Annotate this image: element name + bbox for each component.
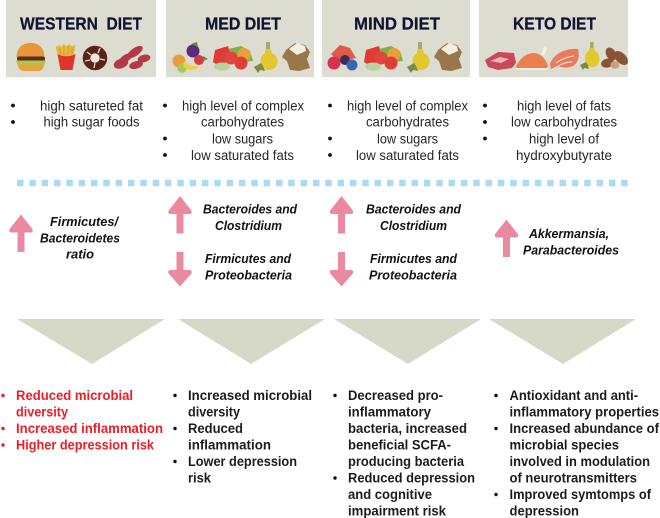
arrow: mind down bbox=[330, 252, 353, 286]
icon: salmon bbox=[550, 49, 579, 69]
text block: western microbiota: Firmicutes/ bbox=[50, 215, 120, 229]
text block: keto diet characteristics: low carbohydrates bbox=[511, 115, 617, 130]
text block: med microbiota: Clostridium bbox=[215, 219, 282, 233]
text block: keto outcomes: inflammatory properties bbox=[510, 405, 659, 420]
text block: western outcomes: Reduced microbial bbox=[16, 388, 133, 403]
icon: flour sack bbox=[282, 43, 310, 71]
text block: mind diet characteristics bbox=[328, 98, 468, 163]
text block: med diet characteristics bbox=[163, 98, 304, 163]
text block: mind outcomes: producing bacteria bbox=[348, 454, 464, 469]
icon: vegetables bbox=[213, 46, 253, 70]
icon: almonds bbox=[600, 46, 631, 69]
text block: western outcomes: Increased inflammation bbox=[16, 421, 163, 436]
text block: med outcomes: Increased microbial bbox=[188, 388, 312, 403]
text block: western outcomes: diversity bbox=[16, 405, 68, 420]
text block: mind microbiota: Firmicutes and bbox=[370, 252, 457, 266]
icon: steak bbox=[485, 52, 516, 70]
panel: mind diet header bbox=[322, 0, 470, 77]
panel: med diet header bbox=[166, 0, 314, 77]
text block: med diet characteristics: low saturated fats bbox=[191, 148, 294, 163]
text block: med outcomes: Reduced bbox=[188, 421, 243, 436]
arrow: med down bbox=[168, 252, 192, 286]
panel: keto diet header bbox=[479, 0, 631, 77]
text block: western diet characteristics: high sugar foods bbox=[44, 115, 140, 130]
text block: keto microbiota: Akkermansia, bbox=[528, 227, 609, 241]
heading: western diet: WESTERN DIET bbox=[20, 14, 142, 34]
arrow: med chevron bbox=[178, 319, 325, 364]
text block: western microbiota: Bacteroidetes bbox=[40, 232, 120, 246]
text block: keto microbiota bbox=[523, 227, 619, 258]
arrow: mind chevron bbox=[334, 319, 481, 364]
text block: western diet characteristics: high satureted fat bbox=[40, 98, 143, 113]
text block: mind outcomes: and cognitive bbox=[348, 487, 432, 502]
text block: mind diet characteristics: carbohydrates bbox=[366, 115, 449, 130]
icon: olive oil bbox=[580, 42, 600, 70]
icon: fries bbox=[56, 44, 76, 70]
text block: mind outcomes bbox=[333, 388, 475, 518]
text block: mind outcomes: bacteria, increased bbox=[348, 421, 467, 436]
text block: mind microbiota bbox=[366, 202, 461, 282]
arrow: keto up bbox=[495, 220, 518, 257]
text block: med outcomes: Lower depression bbox=[188, 454, 297, 469]
text block: med outcomes bbox=[173, 388, 312, 486]
text block: western outcomes: Higher depression risk bbox=[16, 438, 154, 452]
text block: med microbiota: Proteobacteria bbox=[205, 268, 292, 282]
text block: keto diet characteristics bbox=[483, 98, 617, 163]
text block: keto outcomes: involved in modulation bbox=[510, 454, 650, 469]
text block: keto diet characteristics: high level of fats bbox=[517, 98, 611, 113]
text block: keto outcomes: Increased abundance of bbox=[510, 421, 659, 436]
icon: olive oil bbox=[407, 42, 430, 73]
text block: med diet characteristics: low sugars bbox=[212, 131, 273, 146]
text block: keto microbiota: Parabacteroides bbox=[523, 244, 619, 258]
text block: keto outcomes: microbial species bbox=[510, 438, 619, 452]
heading: keto diet: KETO DIET bbox=[513, 14, 596, 34]
text block: med diet characteristics: carbohydrates bbox=[201, 115, 284, 130]
icon: fruits bbox=[172, 42, 208, 73]
arrow: med up bbox=[168, 196, 192, 234]
text block: med outcomes: risk bbox=[188, 470, 211, 486]
text block: med microbiota: Firmicutes and bbox=[205, 252, 291, 266]
text block: mind outcomes: Decreased pro- bbox=[348, 388, 443, 403]
text block: mind outcomes: inflammatory bbox=[348, 405, 431, 420]
panel: western diet header bbox=[6, 0, 156, 77]
heading: mind diet: MIND DIET bbox=[354, 14, 440, 34]
text block: med outcomes: inflammation bbox=[188, 438, 271, 452]
icon: vegetables bbox=[364, 46, 403, 70]
text block: mind diet characteristics: low sugars bbox=[377, 131, 438, 146]
text block: keto outcomes: of neurotransmitters bbox=[510, 470, 637, 486]
text block: keto diet characteristics: high level of bbox=[529, 131, 599, 146]
text block: western diet characteristics bbox=[11, 98, 143, 130]
text block: western outcomes bbox=[1, 388, 163, 452]
text block: mind outcomes: Reduced depression bbox=[348, 470, 475, 486]
text block: keto outcomes: Antioxidant and anti- bbox=[510, 388, 638, 403]
heading: med diet: MED DIET bbox=[205, 14, 281, 34]
icon: roast chicken bbox=[516, 47, 548, 70]
text block: mind outcomes: beneficial SCFA- bbox=[348, 438, 451, 452]
text block: keto outcomes bbox=[494, 388, 659, 518]
arrow: western chevron bbox=[17, 319, 165, 364]
icon: burger bbox=[16, 43, 46, 71]
arrow: mind up bbox=[330, 196, 353, 234]
text block: mind microbiota: Proteobacteria bbox=[369, 268, 457, 282]
icon: sausages bbox=[112, 44, 151, 71]
text block: med microbiota: Bacteroides and bbox=[203, 202, 297, 216]
text block: med diet characteristics: high level of complex bbox=[182, 98, 304, 113]
icon: olive oil bbox=[254, 42, 278, 73]
arrow: western up bbox=[9, 214, 33, 252]
icon: berries bbox=[328, 45, 358, 70]
text block: keto outcomes: Improved symtomps of bbox=[510, 487, 651, 502]
text block: western microbiota bbox=[40, 215, 120, 262]
text block: mind diet characteristics: high level of complex bbox=[347, 98, 468, 113]
text block: mind diet characteristics: low saturated fats bbox=[356, 148, 459, 163]
text block: mind microbiota: Clostridium bbox=[380, 219, 447, 233]
arrow: keto chevron bbox=[489, 319, 636, 364]
text block: med microbiota bbox=[203, 202, 297, 282]
text block: mind microbiota: Bacteroides and bbox=[366, 202, 461, 216]
icon: donut bbox=[85, 48, 105, 68]
text block: med outcomes: diversity bbox=[188, 405, 240, 420]
text block: western microbiota: ratio bbox=[66, 248, 94, 262]
text block: keto diet characteristics: hydroxybutyrate bbox=[516, 148, 612, 163]
icon: flour sack bbox=[434, 43, 462, 71]
